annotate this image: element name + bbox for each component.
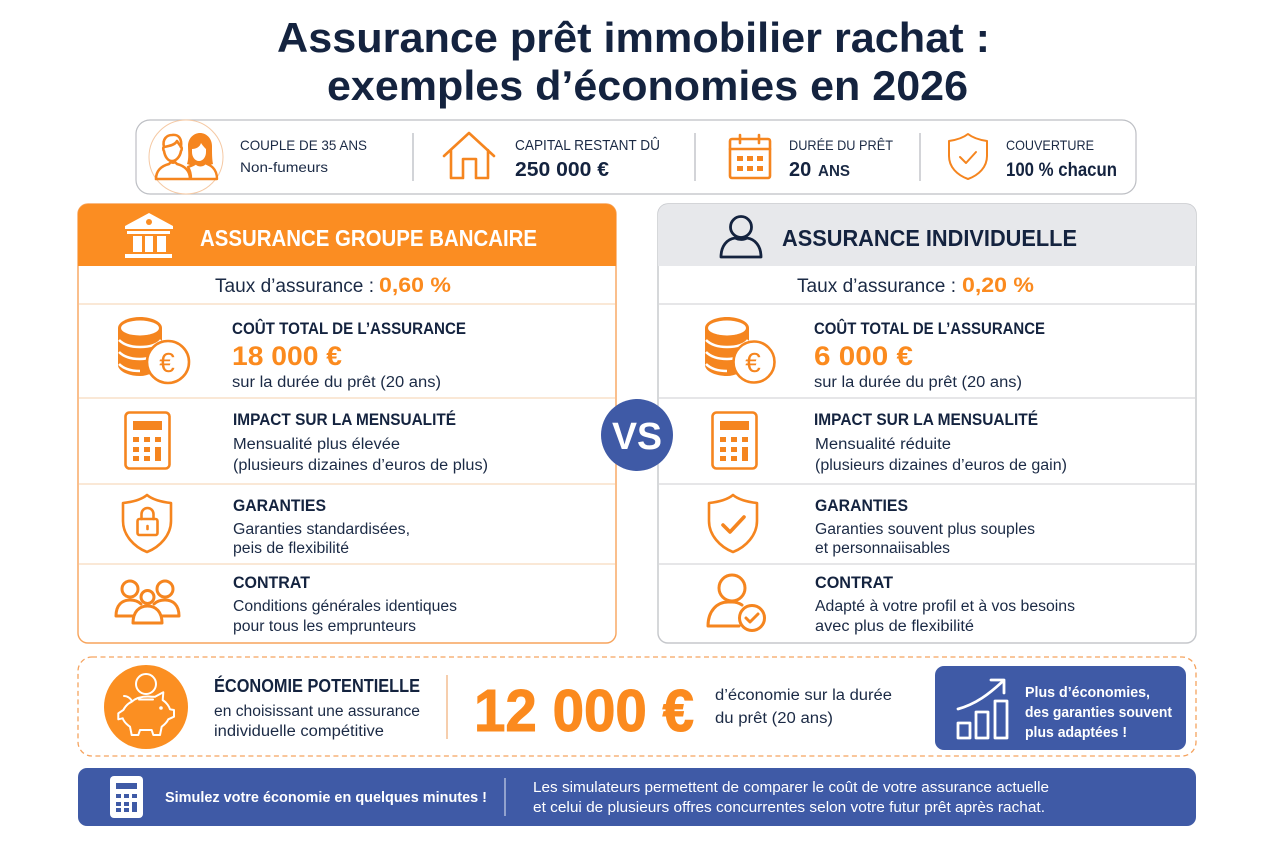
text: individual guarantees: et personnaiisables: [815, 540, 950, 557]
row: individual guarantees: [709, 495, 1035, 557]
text: duration: DURÉE DU PRÊT: [789, 137, 893, 153]
icon: bank: [125, 213, 173, 258]
text: individual contract: [815, 574, 1075, 635]
text: individual cost: 6 000 €: [814, 341, 913, 371]
icon: coins: [118, 317, 189, 383]
text: individual guarantees: [815, 497, 1035, 557]
title: [277, 14, 990, 109]
icon: growth chart: [958, 680, 1007, 738]
text: individual contract: Adapté à votre profil et à vos besoins: [815, 598, 1075, 615]
text: group guarantees: Garanties standardisées,: [233, 521, 410, 538]
text: savings description: en choisissant une assurance: [214, 703, 420, 720]
text: individual cost: COÛT TOTAL DE L’ASSURANCE: [814, 319, 1045, 338]
icon: shield check: [709, 495, 757, 552]
text: group contract: pour tous les emprunteurs: [233, 618, 416, 635]
text: group monthly impact: Mensualité plus élevée: [233, 436, 400, 453]
icon: calculator: [126, 412, 170, 468]
icon: piggy bank: [104, 665, 188, 749]
savings amount: 12 000 €: [474, 678, 694, 744]
text: couple: COUPLE DE 35 ANS: [240, 137, 367, 153]
icon: coins: €: [159, 347, 175, 378]
icon: shield lock: [123, 495, 171, 552]
text: group monthly impact: IMPACT SUR LA MENSUALITÉ: [233, 410, 456, 429]
icon: person: [721, 216, 761, 257]
text: capital: 250 000 €: [515, 159, 609, 181]
row: group cost: [118, 317, 466, 391]
callout: more savings: [935, 666, 1186, 750]
text: couple: Non-fumeurs: [240, 159, 328, 175]
text: individual cost: sur la durée du prêt (20 ans): [814, 374, 1022, 391]
text: individual monthly impact: [814, 410, 1067, 474]
text: savings duration: du prêt (20 ans): [715, 710, 833, 727]
text: group contract: [233, 574, 457, 635]
rate: group: Taux d’assurance :: [215, 276, 374, 297]
panel: individual insurance: [658, 204, 1196, 643]
panel header: group: [78, 204, 616, 266]
icon: calculator: [712, 412, 756, 468]
VS badge: VS: [612, 416, 662, 458]
text: capital: CAPITAL RESTANT DÛ: [515, 137, 660, 154]
text: coverage: COUVERTURE: [1006, 137, 1094, 153]
text: individual guarantees: GARANTIES: [815, 497, 908, 515]
row: group monthly impact: [126, 410, 488, 474]
text: duration: ANS: [818, 163, 850, 180]
text: coverage: [1006, 137, 1117, 181]
text: group guarantees: GARANTIES: [233, 497, 326, 515]
text: individual monthly impact: Mensualité réduite: [815, 436, 951, 453]
icon: white calculator: [110, 776, 143, 818]
text: savings duration: [715, 687, 892, 727]
text: callout: des garanties souvent: [1025, 705, 1172, 721]
text: callout: [1025, 685, 1172, 741]
text: simulator description: [533, 780, 1049, 816]
row: individual monthly impact: [712, 410, 1067, 474]
text: group guarantees: peis de flexibilité: [233, 540, 349, 557]
text: capital: [515, 137, 660, 181]
icon: shield check: [949, 134, 987, 179]
panel: group bank insurance: [78, 204, 616, 643]
row: individual cost: [705, 317, 1045, 391]
text: individual cost: [814, 319, 1045, 391]
text: group monthly impact: [233, 410, 488, 474]
text: callout: Plus d’économies,: [1025, 685, 1150, 701]
text: group cost: [232, 319, 466, 391]
text: call to action: Simulez votre économie en quelques minutes !: [165, 790, 487, 806]
text: savings duration: d’économie sur la durée: [715, 687, 892, 704]
rate: individual: Taux d’assurance :: [797, 276, 956, 297]
heading: individual: ASSURANCE INDIVIDUELLE: [782, 225, 1077, 251]
text: individual guarantees: Garanties souvent plus souples: [815, 521, 1035, 538]
text: callout: plus adaptées !: [1025, 725, 1127, 741]
VS badge: [601, 399, 673, 471]
icon: house: [444, 133, 494, 178]
panel: loan profile strip: [136, 120, 1136, 194]
text: group contract: CONTRAT: [233, 574, 310, 592]
text: simulator description: Les simulateurs permettent de comparer le coût de votre assurance actuelle: [533, 780, 1049, 796]
text: individual contract: avec plus de flexibilité: [815, 618, 974, 635]
text: group cost: sur la durée du prêt (20 ans): [232, 374, 441, 391]
icon: coins: [705, 317, 774, 382]
text: savings description: individuelle compétitive: [214, 723, 384, 740]
icon: couple: [149, 120, 223, 194]
text: savings description: ÉCONOMIE POTENTIELLE: [214, 675, 420, 696]
title: Assurance prêt immobilier rachat :: [277, 14, 990, 61]
rate: individual: [797, 274, 1034, 297]
rate: group: 0,60 %: [379, 274, 451, 297]
icon: person check: [708, 575, 764, 630]
rate: group: [215, 274, 451, 297]
text: simulator description: et celui de plusieurs offres concurrentes selon votre futur prêt après rachat.: [533, 800, 1045, 816]
text: group cost: 18 000 €: [232, 341, 342, 371]
text: duration: [789, 137, 893, 181]
text: individual monthly impact: (plusieurs dizaines d’euros de gain): [815, 457, 1067, 474]
banner: simulator: [78, 768, 1196, 826]
title: exemples d’économies en 2026: [327, 62, 968, 109]
text: coverage: 100 % chacun: [1006, 160, 1117, 181]
text: individual contract: CONTRAT: [815, 574, 893, 592]
row: group contract: [116, 574, 457, 635]
text: couple: [240, 137, 367, 175]
text: individual monthly impact: IMPACT SUR LA MENSUALITÉ: [814, 410, 1038, 429]
icon: calendar: [730, 135, 770, 178]
text: group guarantees: [233, 497, 410, 557]
rate: individual: 0,20 %: [962, 274, 1034, 297]
text: group monthly impact: (plusieurs dizaines d’euros de plus): [233, 457, 488, 474]
icon: group of people: [116, 581, 179, 623]
row: individual contract: [708, 574, 1075, 635]
heading: group: ASSURANCE GROUPE BANCAIRE: [200, 225, 537, 251]
text: group contract: Conditions générales identiques: [233, 598, 457, 615]
row: group guarantees: [123, 495, 410, 557]
panel header: individual: [658, 204, 1196, 266]
text: savings description: [214, 675, 420, 740]
text: group cost: COÛT TOTAL DE L’ASSURANCE: [232, 319, 466, 338]
panel: potential savings: [78, 657, 1196, 756]
icon: coins: €: [745, 347, 761, 378]
text: duration: 20: [789, 159, 811, 181]
